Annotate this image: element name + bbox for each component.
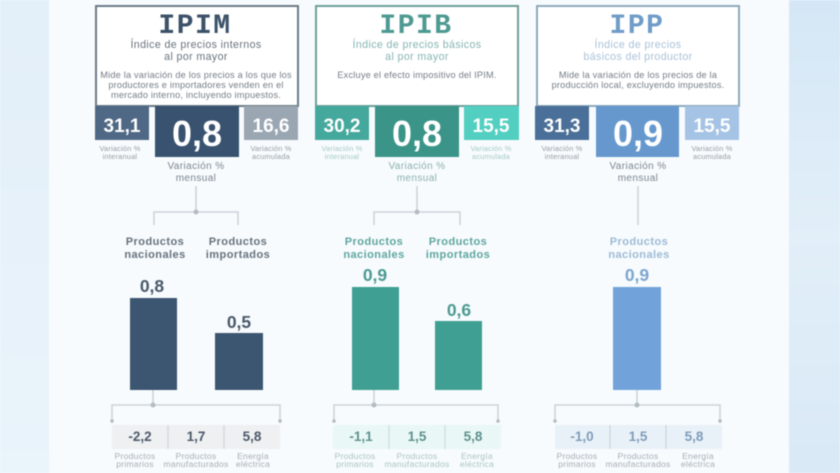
IPIM description box: Mide la variación de los precios a los que los — [100, 70, 292, 80]
IPIB connector to breakdown — [332, 390, 500, 423]
IPIM interannual stat: Variación % — [99, 144, 141, 153]
IPIB bar chart: 0,9 — [363, 265, 387, 285]
IPP description box — [537, 6, 739, 106]
IPIM description box: al por mayor — [164, 51, 228, 63]
IPIB breakdown values: 5,8 — [464, 429, 483, 444]
IPIB category labels: nacionales — [343, 249, 405, 261]
IPP connector to breakdown — [553, 390, 722, 423]
IPP monthly stat: mensual — [618, 173, 658, 184]
IPIB breakdown values: primarios — [336, 459, 374, 469]
IPIM accumulated stat: Variación % — [250, 144, 292, 153]
IPIB bar chart: 0,6 — [447, 300, 471, 320]
IPIM description box: IPIM — [158, 11, 232, 42]
IPP breakdown values: 5,8 — [685, 429, 704, 444]
IPIM connector to breakdown — [110, 390, 282, 423]
IPIB breakdown values: Productos — [335, 451, 375, 461]
IPIM description box: Índice de precios internos — [130, 38, 262, 51]
IPIM monthly stat: 0,8 — [172, 113, 222, 154]
IPIB monthly stat: Variación % — [388, 161, 446, 172]
IPIM category labels: importados — [206, 249, 270, 261]
IPP interannual stat: interanual — [545, 152, 579, 161]
IPIM description box: mercado interno, incluyendo impuestos. — [111, 90, 281, 100]
IPIM description box — [96, 6, 298, 106]
IPP bar chart: 0,9 — [625, 265, 649, 285]
IPIB monthly stat — [375, 106, 459, 184]
panel: IPIM — [95, 6, 298, 469]
IPIM breakdown values: Productos — [176, 451, 216, 461]
IPP breakdown values: 1,5 — [629, 429, 648, 444]
IPIB breakdown values: Energía — [461, 451, 493, 461]
IPIM breakdown values: -2,2 — [128, 429, 152, 444]
IPIB description box — [316, 6, 518, 106]
IPP category label: nacionales — [608, 249, 670, 261]
IPIM bar chart — [130, 276, 263, 390]
IPIB breakdown values: Productos — [397, 451, 437, 461]
IPP breakdown values: manufacturados — [605, 459, 671, 469]
background side band right — [789, 0, 840, 473]
IPIB accumulated stat — [464, 106, 519, 161]
IPIB breakdown values — [333, 425, 501, 469]
IPP description box: Mide la variación de los precios de la — [559, 70, 718, 80]
IPIM breakdown values: primarios — [116, 459, 154, 469]
IPP interannual stat: Variación % — [541, 144, 583, 153]
IPIM connector to categories — [154, 186, 238, 225]
IPP monthly stat — [596, 106, 679, 184]
IPP description box: producción local, excluyendo impuestos. — [552, 80, 724, 90]
IPP description box: Índice de precios — [595, 38, 681, 51]
IPP breakdown values: -1,0 — [570, 429, 594, 444]
IPIM breakdown values: 1,7 — [187, 429, 205, 444]
IPP category label: Productos — [610, 236, 668, 248]
IPIB breakdown values: 1,5 — [408, 429, 427, 444]
IPIB monthly stat: 0,8 — [392, 113, 442, 154]
IPP connector to category — [637, 186, 639, 225]
IPIB description box: Índice de precios básicos — [353, 38, 481, 51]
panel: IPP — [535, 6, 739, 469]
IPIM monthly stat: Variación % — [167, 161, 225, 172]
IPP bar chart — [613, 265, 661, 390]
IPP accumulated stat: Variación % — [691, 144, 733, 153]
IPP accumulated stat: 15,5 — [694, 116, 731, 137]
IPIB breakdown values: eléctrica — [460, 459, 494, 469]
IPIB category labels: Productos — [429, 236, 487, 248]
IPP breakdown values — [555, 425, 722, 469]
IPIB interannual stat — [315, 106, 369, 161]
IPIB accumulated stat: Variación % — [470, 144, 512, 153]
IPP breakdown values: Energía — [682, 451, 714, 461]
IPP category label — [608, 236, 670, 261]
IPIB accumulated stat: acumulada — [472, 152, 511, 161]
IPIB monthly stat: mensual — [397, 173, 437, 184]
IPIB category labels — [343, 236, 490, 261]
IPIB interannual stat: Variación % — [321, 144, 363, 153]
IPIB category labels: Productos — [345, 236, 403, 248]
IPP accumulated stat: acumulada — [693, 152, 732, 161]
IPIM category labels: Productos — [209, 236, 267, 248]
IPIB breakdown values: -1,1 — [349, 429, 373, 444]
IPP breakdown values: primarios — [558, 459, 596, 469]
IPP monthly stat: Variación % — [609, 161, 667, 172]
IPIM category labels — [124, 236, 270, 261]
IPIM breakdown values: manufacturados — [163, 459, 229, 469]
IPP interannual stat — [535, 106, 589, 161]
IPIM breakdown values — [112, 425, 280, 469]
background side band left — [0, 0, 49, 473]
panel: IPIB — [315, 6, 519, 469]
IPP interannual stat: 31,3 — [544, 116, 580, 137]
IPIM category labels: nacionales — [124, 249, 186, 261]
IPIM interannual stat: interanual — [103, 152, 137, 161]
IPIB description box: Excluye el efecto impositivo del IPIM. — [337, 70, 497, 80]
IPIM bar chart: 0,8 — [140, 276, 164, 296]
IPIM interannual stat: 31,1 — [104, 116, 141, 137]
IPIM breakdown values: Productos — [115, 451, 155, 461]
IPIM monthly stat: mensual — [176, 173, 216, 184]
IPIM breakdown values: Energía — [237, 451, 269, 461]
IPIM breakdown values: 5,8 — [243, 429, 262, 444]
IPIM description box: productores e importadores venden en el — [108, 80, 284, 90]
IPP breakdown values: eléctrica — [681, 459, 715, 469]
IPP description box: básicos del productor — [583, 51, 693, 63]
IPP breakdown values: Productos — [557, 451, 597, 461]
IPP breakdown values: Productos — [618, 451, 658, 461]
IPIB category labels: importados — [426, 249, 490, 261]
IPIB accumulated stat: 15,5 — [473, 116, 510, 137]
IPIB breakdown values: manufacturados — [384, 459, 450, 469]
IPIM accumulated stat — [244, 106, 298, 161]
IPIM bar chart: 0,5 — [227, 312, 251, 332]
IPIM accumulated stat: 16,6 — [253, 116, 289, 137]
IPIM interannual stat — [95, 106, 149, 161]
IPIB interannual stat: interanual — [325, 152, 359, 161]
IPIB interannual stat: 30,2 — [324, 116, 360, 137]
IPIM breakdown values: eléctrica — [236, 459, 270, 469]
IPIB description box: al por mayor — [385, 51, 449, 63]
IPIM monthly stat — [155, 106, 239, 184]
IPIM accumulated stat: acumulada — [252, 152, 291, 161]
IPP description box: IPP — [610, 11, 664, 42]
IPIB description box: IPIB — [379, 11, 453, 42]
IPIM category labels: Productos — [126, 236, 184, 248]
IPP accumulated stat — [685, 106, 739, 161]
IPP monthly stat: 0,9 — [613, 113, 663, 154]
IPIB bar chart — [352, 265, 482, 390]
IPIB connector to categories — [374, 186, 460, 225]
